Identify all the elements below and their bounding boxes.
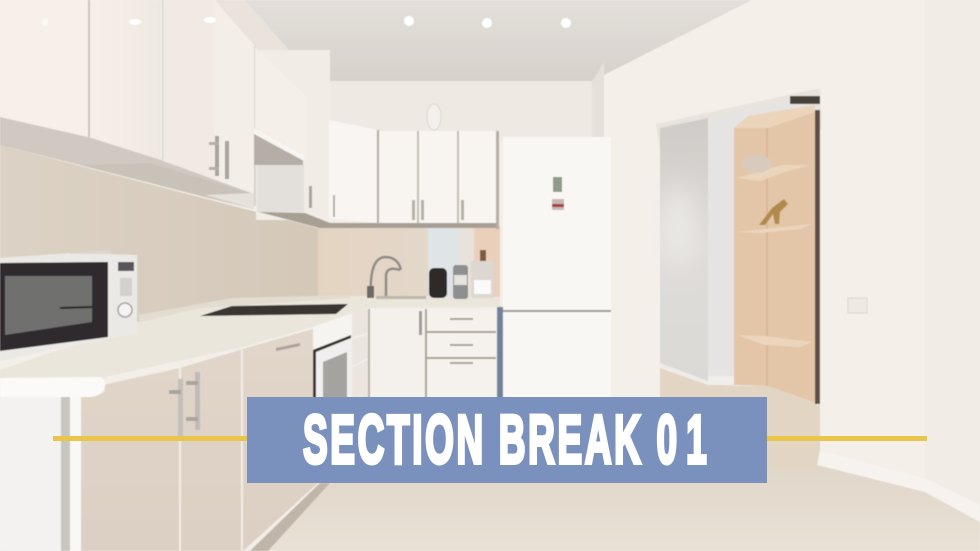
lower left cabinets [80,329,318,551]
wooden figurine [759,199,788,225]
back backsplash [318,226,428,300]
end panel [0,397,61,551]
cooktop [200,304,348,316]
microwave [0,253,137,361]
faucet [371,257,401,296]
kettle [429,268,447,298]
grinder [453,265,468,299]
upper back cabinets [329,120,378,223]
left wall cornice [215,0,316,125]
ceiling [240,0,752,81]
doorway hallway [656,88,822,150]
lower right cabinets [350,307,497,400]
wall cabinets over hood [256,50,330,220]
coffee machine [471,261,494,298]
oven [313,312,352,349]
right wall [590,0,980,551]
title banner [247,397,767,483]
glass bowl on shelf [742,155,772,173]
cabinet reflections [129,19,141,25]
countertop [0,296,500,397]
left backsplash [0,145,318,330]
corner shelf unit [734,105,815,403]
accent line: left [53,436,247,441]
light switch [848,298,867,313]
ornament on cabinet [427,104,441,130]
right wall skirting [817,450,980,522]
title text: SECTION BREAK 01 [303,401,709,478]
accent line: right [767,436,927,441]
back wall [316,81,592,141]
fridge [503,137,611,397]
recessed ceiling lights [404,16,414,26]
upper left cabinets [0,117,254,209]
floor [268,462,980,551]
